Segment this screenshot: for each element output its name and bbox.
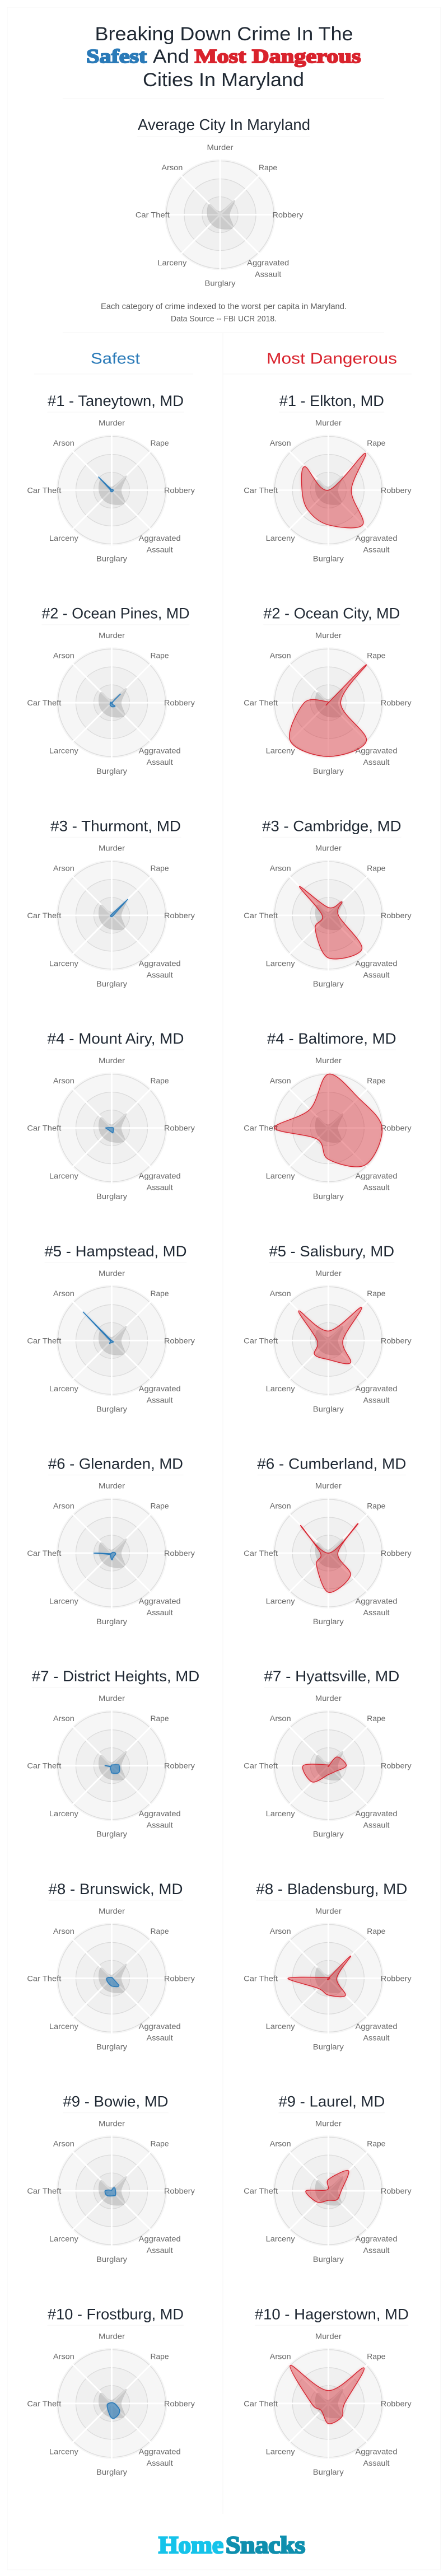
heading: #9 - Laurel, MD bbox=[278, 2093, 385, 2110]
axis labels: Robbery bbox=[164, 698, 195, 707]
logo: HomeSnacks: Home bbox=[158, 2532, 223, 2559]
radar shape bbox=[110, 694, 120, 707]
axis labels: Car Theft bbox=[244, 2186, 278, 2195]
axis labels: Aggravated bbox=[355, 2022, 397, 2031]
radar shape bbox=[110, 899, 128, 917]
axis labels: Murder bbox=[99, 1269, 125, 1278]
axis labels: Arson bbox=[53, 2139, 74, 2148]
axis labels: Rape bbox=[150, 2139, 169, 2148]
axis labels: Arson bbox=[53, 2351, 74, 2360]
axis labels: Car Theft bbox=[27, 1124, 61, 1133]
axis labels: Rape bbox=[150, 1289, 169, 1298]
axis labels: Rape bbox=[367, 1714, 386, 1723]
heading: #6 - Cumberland, MD bbox=[257, 1456, 406, 1472]
heading: #1 - Taneytown, MD bbox=[48, 392, 184, 409]
axis labels: Burglary bbox=[96, 554, 127, 563]
axis labels: Car Theft bbox=[27, 911, 61, 920]
chart: average city radar: Robbery bbox=[272, 211, 303, 219]
axis labels: Aggravated bbox=[139, 1384, 181, 1393]
heading: average city: Average City In Maryland bbox=[138, 116, 310, 133]
axis labels: Robbery bbox=[164, 1549, 195, 1558]
panel: #9 Bowie bbox=[27, 2093, 195, 2264]
panel: #2 Ocean Pines bbox=[27, 605, 195, 775]
axis labels bbox=[27, 2119, 195, 2264]
axis labels: Murder bbox=[315, 843, 342, 852]
heading: #4 - Mount Airy, MD bbox=[47, 1030, 184, 1047]
axis labels: Burglary bbox=[96, 2255, 127, 2264]
axis labels: Rape bbox=[150, 438, 169, 447]
axis labels bbox=[244, 1056, 412, 1201]
axis labels: Murder bbox=[99, 418, 125, 427]
axis labels: Assault bbox=[147, 2458, 173, 2467]
axis labels: Robbery bbox=[381, 698, 412, 707]
axis labels: Aggravated bbox=[139, 1809, 181, 1818]
radar shape bbox=[302, 1757, 346, 1782]
heading: #10 - Frostburg, MD bbox=[48, 2306, 184, 2322]
axis labels: Larceny bbox=[266, 1809, 295, 1818]
axis labels bbox=[27, 1694, 195, 1839]
radar shape bbox=[105, 2187, 116, 2196]
axis labels bbox=[244, 631, 412, 775]
radar shape bbox=[83, 1312, 114, 1343]
panel: #6 Cumberland bbox=[244, 1456, 412, 1626]
axis labels: Murder bbox=[99, 1056, 125, 1065]
axis labels: Arson bbox=[53, 1289, 74, 1298]
radar shape bbox=[107, 2402, 120, 2419]
panel: #8 Brunswick bbox=[27, 1881, 195, 2051]
heading: #8 - Brunswick, MD bbox=[48, 1881, 183, 1897]
axis labels: Burglary bbox=[313, 2042, 344, 2051]
chart: average city radar: Assault bbox=[255, 270, 281, 279]
axis labels: Robbery bbox=[381, 1974, 412, 1983]
panel: #5 Hampstead bbox=[27, 1243, 195, 1413]
heading: #5 - Hampstead, MD bbox=[45, 1243, 186, 1260]
axis labels: Rape bbox=[150, 1502, 169, 1511]
axis labels: Robbery bbox=[381, 1761, 412, 1770]
axis labels bbox=[27, 843, 195, 988]
axis labels: Car Theft bbox=[27, 1761, 61, 1770]
axis labels: Aggravated bbox=[139, 1597, 181, 1606]
radar shape bbox=[105, 1128, 113, 1133]
axis labels: Car Theft bbox=[244, 1124, 278, 1133]
footnote bbox=[101, 302, 347, 324]
axis labels: Car Theft bbox=[244, 1549, 278, 1558]
chart: average city radar: Murder bbox=[207, 143, 234, 152]
axis labels: Robbery bbox=[381, 486, 412, 495]
logo: HomeSnacks bbox=[158, 2532, 305, 2559]
axis labels: Murder bbox=[315, 1694, 342, 1703]
axis labels: Assault bbox=[363, 2033, 390, 2042]
axis labels: Larceny bbox=[49, 2447, 78, 2456]
axis labels: Larceny bbox=[266, 2447, 295, 2456]
axis labels: Car Theft bbox=[244, 911, 278, 920]
axis labels: Assault bbox=[147, 1183, 173, 1192]
radar shape bbox=[99, 477, 113, 492]
title: Cities In Maryland bbox=[143, 69, 304, 91]
radar shape bbox=[298, 1307, 362, 1364]
radar shape bbox=[105, 1765, 120, 1774]
axis labels: Robbery bbox=[164, 1124, 195, 1133]
axis labels: Larceny bbox=[266, 2234, 295, 2243]
axis labels: Robbery bbox=[381, 1124, 412, 1133]
axis labels: Aggravated bbox=[355, 2447, 397, 2456]
axis labels: Murder bbox=[315, 418, 342, 427]
axis labels: Burglary bbox=[96, 766, 127, 775]
axis labels: Assault bbox=[363, 1821, 390, 1830]
radar shape bbox=[301, 1523, 358, 1592]
axis labels: Burglary bbox=[313, 554, 344, 563]
axis labels: Burglary bbox=[96, 2467, 127, 2476]
axis labels: Car Theft bbox=[244, 698, 278, 707]
column heading: most dangerous: Most Dangerous bbox=[267, 349, 397, 367]
axis labels bbox=[244, 2119, 412, 2264]
axis labels: Rape bbox=[150, 2351, 169, 2360]
title bbox=[86, 24, 361, 91]
panel: #4 Baltimore bbox=[244, 1030, 412, 1201]
axis labels: Larceny bbox=[49, 1171, 78, 1180]
axis labels: Arson bbox=[270, 1502, 291, 1511]
axis labels bbox=[244, 418, 412, 563]
axis labels bbox=[244, 843, 412, 988]
chart: average city radar bbox=[136, 143, 303, 288]
axis labels: Burglary bbox=[96, 1192, 127, 1201]
axis labels: Arson bbox=[53, 1076, 74, 1085]
axis labels: Arson bbox=[53, 1502, 74, 1511]
axis labels: Aggravated bbox=[355, 959, 397, 967]
axis labels: Larceny bbox=[49, 959, 78, 967]
axis labels: Assault bbox=[363, 758, 390, 766]
axis labels: Car Theft bbox=[27, 486, 61, 495]
axis labels: Robbery bbox=[164, 486, 195, 495]
axis labels: Aggravated bbox=[139, 2447, 181, 2456]
axis labels: Assault bbox=[147, 758, 173, 766]
axis labels: Car Theft bbox=[244, 1336, 278, 1345]
radar shape bbox=[301, 454, 366, 528]
axis labels: Assault bbox=[147, 2033, 173, 2042]
axis labels: Car Theft bbox=[27, 2399, 61, 2408]
axis labels: Larceny bbox=[266, 746, 295, 755]
axis labels: Assault bbox=[147, 2246, 173, 2255]
axis labels: Larceny bbox=[49, 746, 78, 755]
heading: #1 - Elkton, MD bbox=[279, 392, 384, 409]
axis labels: Burglary bbox=[96, 2042, 127, 2051]
axis labels: Arson bbox=[53, 1927, 74, 1935]
axis labels: Assault bbox=[363, 1608, 390, 1617]
panel: #6 Glenarden bbox=[27, 1456, 195, 1626]
axis labels bbox=[27, 1269, 195, 1413]
axis labels: Rape bbox=[150, 1714, 169, 1723]
axis labels: Aggravated bbox=[139, 534, 181, 543]
axis labels: Arson bbox=[53, 438, 74, 447]
heading: #8 - Bladensburg, MD bbox=[256, 1881, 407, 1897]
axis labels: Larceny bbox=[49, 2022, 78, 2031]
chart: average city radar: Car Theft bbox=[136, 211, 170, 219]
axis labels: Burglary bbox=[96, 979, 127, 988]
axis labels: Arson bbox=[270, 2139, 291, 2148]
panel: #7 District Heights bbox=[27, 1668, 200, 1839]
axis labels: Car Theft bbox=[27, 2186, 61, 2195]
axis labels: Rape bbox=[150, 1076, 169, 1085]
axis labels bbox=[244, 1481, 412, 1626]
axis labels: Robbery bbox=[164, 2186, 195, 2195]
axis labels: Aggravated bbox=[355, 1809, 397, 1818]
axis labels: Burglary bbox=[313, 1617, 344, 1626]
radar shape bbox=[290, 665, 366, 756]
axis labels: Murder bbox=[315, 2119, 342, 2128]
axis labels: Rape bbox=[150, 863, 169, 872]
heading: #3 - Thurmont, MD bbox=[50, 817, 181, 834]
axis labels: Larceny bbox=[49, 534, 78, 543]
axis labels: Aggravated bbox=[139, 1171, 181, 1180]
axis labels: Burglary bbox=[313, 979, 344, 988]
heading: #2 - Ocean City, MD bbox=[263, 605, 400, 622]
panel: #10 Frostburg bbox=[27, 2306, 195, 2476]
axis labels: Arson bbox=[270, 1714, 291, 1723]
axis labels: Murder bbox=[315, 1481, 342, 1490]
panel: #1 Taneytown bbox=[27, 392, 195, 563]
column heading: safest: Safest bbox=[91, 349, 140, 367]
axis labels bbox=[244, 2331, 412, 2476]
axis labels: Car Theft bbox=[244, 486, 278, 495]
chart: average city radar: Burglary bbox=[204, 279, 236, 288]
axis labels: Murder bbox=[315, 1906, 342, 1915]
axis labels: Aggravated bbox=[139, 2022, 181, 2031]
heading: #4 - Baltimore, MD bbox=[267, 1030, 396, 1047]
axis labels: Aggravated bbox=[139, 2234, 181, 2243]
axis labels: Larceny bbox=[49, 1384, 78, 1393]
axis labels: Larceny bbox=[49, 1809, 78, 1818]
axis labels: Burglary bbox=[313, 2467, 344, 2476]
panel: #4 Mount Airy bbox=[27, 1030, 195, 1201]
axis labels: Car Theft bbox=[27, 1549, 61, 1558]
footnote: Data Source -- FBI UCR 2018. bbox=[171, 314, 277, 324]
axis labels: Arson bbox=[270, 2351, 291, 2360]
axis labels: Rape bbox=[367, 1502, 386, 1511]
title: Breaking Down Crime In The bbox=[95, 24, 353, 45]
axis labels: Murder bbox=[315, 2331, 342, 2340]
axis labels: Robbery bbox=[381, 2399, 412, 2408]
axis labels: Robbery bbox=[164, 1974, 195, 1983]
axis labels bbox=[244, 1694, 412, 1839]
title: And bbox=[153, 46, 189, 67]
axis labels: Larceny bbox=[266, 1171, 295, 1180]
heading: #5 - Salisbury, MD bbox=[269, 1243, 394, 1260]
chart: average city radar: Arson bbox=[161, 163, 183, 172]
axis labels: Arson bbox=[270, 1927, 291, 1935]
axis labels: Murder bbox=[99, 843, 125, 852]
axis labels: Aggravated bbox=[139, 959, 181, 967]
axis labels: Burglary bbox=[313, 2255, 344, 2264]
radar shape bbox=[290, 2365, 364, 2424]
panel: #2 Ocean City bbox=[244, 605, 412, 775]
axis labels: Robbery bbox=[164, 1761, 195, 1770]
radar shape bbox=[300, 886, 362, 959]
heading: #3 - Cambridge, MD bbox=[262, 817, 402, 834]
axis labels: Rape bbox=[367, 2351, 386, 2360]
heading: #2 - Ocean Pines, MD bbox=[41, 605, 189, 622]
axis labels: Larceny bbox=[49, 1597, 78, 1606]
axis labels: Robbery bbox=[381, 2186, 412, 2195]
axis labels: Robbery bbox=[164, 2399, 195, 2408]
axis labels: Rape bbox=[367, 1927, 386, 1935]
axis labels bbox=[27, 1056, 195, 1201]
axis labels: Murder bbox=[99, 631, 125, 640]
axis labels: Rape bbox=[150, 1927, 169, 1935]
axis labels: Arson bbox=[270, 863, 291, 872]
panel: #3 Thurmont bbox=[27, 817, 195, 988]
axis labels: Murder bbox=[99, 1906, 125, 1915]
axis labels: Aggravated bbox=[355, 1384, 397, 1393]
axis labels: Car Theft bbox=[27, 698, 61, 707]
heading: #6 - Glenarden, MD bbox=[48, 1456, 183, 1472]
axis labels: Arson bbox=[53, 651, 74, 660]
axis labels: Robbery bbox=[381, 911, 412, 920]
radar shape bbox=[274, 1074, 382, 1167]
axis labels: Rape bbox=[367, 1289, 386, 1298]
axis labels: Larceny bbox=[266, 1384, 295, 1393]
axis labels: Assault bbox=[147, 545, 173, 554]
chart: average city radar: Larceny bbox=[157, 258, 186, 267]
axis labels: Murder bbox=[99, 2119, 125, 2128]
axis labels: Robbery bbox=[381, 1336, 412, 1345]
logo: HomeSnacks: Snacks bbox=[226, 2532, 305, 2559]
axis labels bbox=[27, 1481, 195, 1626]
axis labels: Aggravated bbox=[355, 1597, 397, 1606]
axis labels: Arson bbox=[270, 1076, 291, 1085]
axis labels: Rape bbox=[367, 1076, 386, 1085]
axis labels: Murder bbox=[315, 1056, 342, 1065]
axis labels: Burglary bbox=[313, 1830, 344, 1839]
axis labels: Murder bbox=[315, 1269, 342, 1278]
axis labels: Assault bbox=[147, 970, 173, 979]
axis labels: Larceny bbox=[266, 1597, 295, 1606]
axis labels: Car Theft bbox=[244, 1761, 278, 1770]
axis labels: Car Theft bbox=[244, 1974, 278, 1983]
axis labels: Assault bbox=[363, 545, 390, 554]
axis labels: Rape bbox=[367, 863, 386, 872]
panel: #3 Cambridge bbox=[244, 817, 412, 988]
axis labels: Arson bbox=[270, 438, 291, 447]
axis labels: Rape bbox=[367, 438, 386, 447]
axis labels: Murder bbox=[99, 1694, 125, 1703]
axis labels: Car Theft bbox=[27, 1336, 61, 1345]
panel: #1 Elkton bbox=[244, 392, 412, 563]
axis labels: Aggravated bbox=[355, 2234, 397, 2243]
axis labels bbox=[244, 1906, 412, 2051]
axis labels: Robbery bbox=[164, 1336, 195, 1345]
axis labels: Robbery bbox=[164, 911, 195, 920]
axis labels: Aggravated bbox=[355, 1171, 397, 1180]
axis labels: Assault bbox=[363, 2458, 390, 2467]
axis labels: Burglary bbox=[313, 1404, 344, 1413]
heading: #7 - District Heights, MD bbox=[32, 1668, 199, 1685]
axis labels: Rape bbox=[367, 2139, 386, 2148]
axis labels: Car Theft bbox=[27, 1974, 61, 1983]
axis labels bbox=[27, 1906, 195, 2051]
axis labels bbox=[27, 2331, 195, 2476]
axis labels: Burglary bbox=[96, 1617, 127, 1626]
panel: #7 Hyattsville bbox=[244, 1668, 412, 1839]
heading: #7 - Hyattsville, MD bbox=[264, 1668, 399, 1685]
axis labels: Burglary bbox=[313, 766, 344, 775]
heading: #9 - Bowie, MD bbox=[63, 2093, 168, 2110]
radar shape bbox=[306, 2171, 349, 2203]
axis labels: Arson bbox=[53, 1714, 74, 1723]
axis labels bbox=[244, 1269, 412, 1413]
axis labels: Assault bbox=[363, 1183, 390, 1192]
axis labels: Murder bbox=[99, 2331, 125, 2340]
panel: #10 Hagerstown bbox=[244, 2306, 412, 2476]
axis labels: Assault bbox=[363, 1395, 390, 1404]
axis labels bbox=[27, 631, 195, 775]
radar shape bbox=[94, 1552, 115, 1560]
axis labels: Assault bbox=[147, 1608, 173, 1617]
axis labels: Robbery bbox=[381, 1549, 412, 1558]
axis labels: Murder bbox=[99, 1481, 125, 1490]
axis labels bbox=[27, 418, 195, 563]
heading: #10 - Hagerstown, MD bbox=[255, 2306, 409, 2322]
axis labels: Aggravated bbox=[355, 746, 397, 755]
panel: #5 Salisbury bbox=[244, 1243, 412, 1413]
footnote: Each category of crime indexed to the worst per capita in Maryland. bbox=[101, 302, 347, 311]
axis labels: Burglary bbox=[96, 1404, 127, 1413]
chart: average city radar: Rape bbox=[259, 163, 277, 172]
axis labels: Assault bbox=[363, 970, 390, 979]
axis labels: Larceny bbox=[266, 959, 295, 967]
panel: #9 Laurel bbox=[244, 2093, 412, 2264]
radar shape bbox=[288, 1956, 351, 1997]
axis labels: Burglary bbox=[96, 1830, 127, 1839]
axis labels: Larceny bbox=[49, 2234, 78, 2243]
axis labels: Assault bbox=[363, 2246, 390, 2255]
axis labels: Assault bbox=[147, 1395, 173, 1404]
axis labels: Arson bbox=[270, 1289, 291, 1298]
axis labels: Larceny bbox=[266, 534, 295, 543]
axis labels: Burglary bbox=[313, 1192, 344, 1201]
title: Safest bbox=[86, 45, 147, 67]
axis labels: Assault bbox=[147, 1821, 173, 1830]
axis labels: Arson bbox=[270, 651, 291, 660]
axis labels: Rape bbox=[367, 651, 386, 660]
title: Most Dangerous bbox=[195, 45, 361, 67]
axis labels: Aggravated bbox=[139, 746, 181, 755]
axis labels: Arson bbox=[53, 863, 74, 872]
axis labels: Larceny bbox=[266, 2022, 295, 2031]
axis labels: Rape bbox=[150, 651, 169, 660]
chart: average city radar: Aggravated bbox=[247, 258, 289, 267]
axis labels: Aggravated bbox=[355, 534, 397, 543]
axis labels: Murder bbox=[315, 631, 342, 640]
axis labels: Car Theft bbox=[244, 2399, 278, 2408]
panel: #8 Bladensburg bbox=[244, 1881, 412, 2051]
radar shape bbox=[106, 1977, 119, 1986]
